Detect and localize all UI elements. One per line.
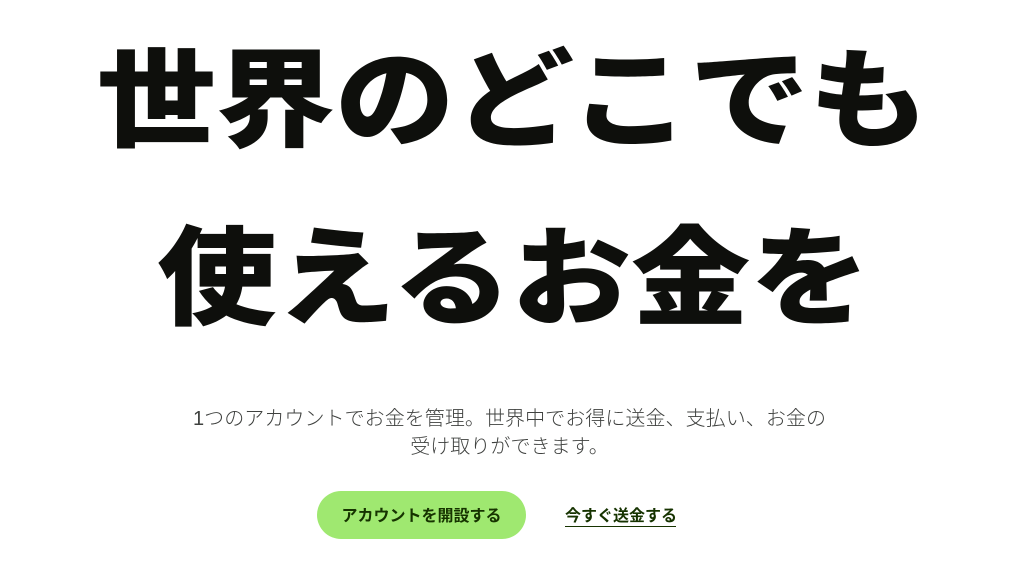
button: open account: アカウントを開設する — [341, 508, 502, 525]
link: send now: 今すぐ送金する — [565, 508, 677, 525]
title: 使えるお金を — [157, 218, 870, 339]
description text: 1つのアカウントでお金を管理。世界中でお得に送金、支払い、お金の — [193, 408, 826, 430]
description text — [193, 408, 826, 458]
button: open account — [317, 491, 526, 539]
description text: 受け取りができます。 — [410, 436, 609, 458]
title: 世界のどこでも — [96, 40, 928, 161]
title — [96, 40, 928, 339]
